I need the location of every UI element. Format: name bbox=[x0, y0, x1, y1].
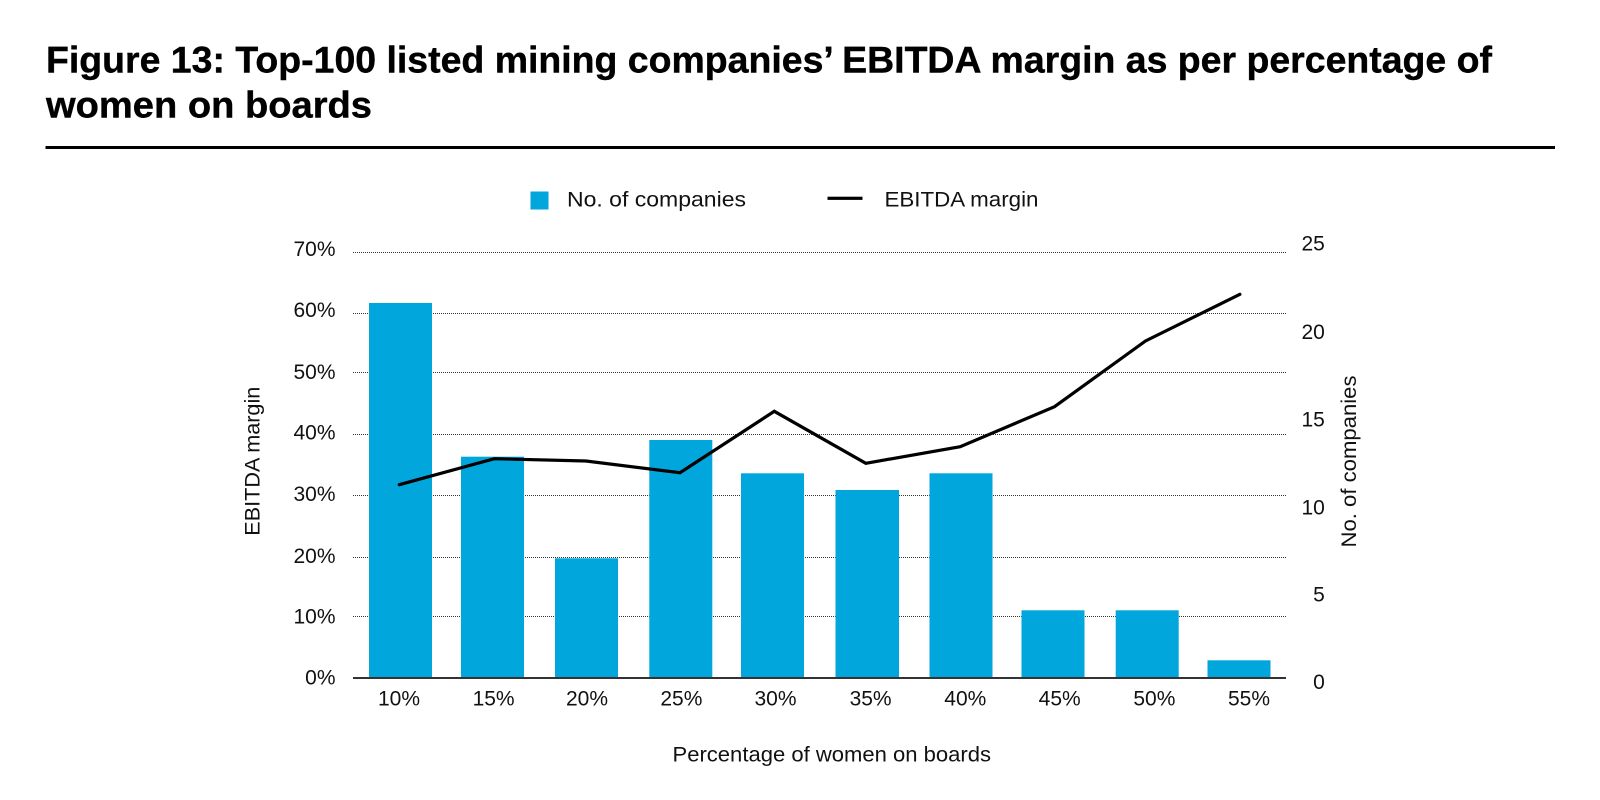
title bbox=[45, 40, 1493, 126]
left axis title: EBITDA margin bbox=[240, 387, 264, 536]
x axis labels: 10% bbox=[378, 688, 420, 711]
right axis labels: 25 bbox=[1301, 233, 1325, 256]
left axis labels: 10% bbox=[293, 606, 336, 629]
title: Figure 13: Top-100 listed mining companies’ EBITDA margin as per percentage of bbox=[46, 40, 1493, 81]
left axis labels: 0% bbox=[305, 666, 336, 689]
right axis labels: 5 bbox=[1313, 584, 1325, 607]
x axis labels: 30% bbox=[754, 688, 797, 711]
x axis labels: 40% bbox=[944, 688, 986, 711]
left axis labels bbox=[293, 238, 336, 689]
x axis title: Percentage of women on boards bbox=[672, 743, 991, 767]
left axis labels: 40% bbox=[293, 421, 336, 444]
x axis labels: 50% bbox=[1133, 688, 1175, 711]
right axis labels: 10 bbox=[1301, 497, 1325, 520]
x axis labels: 45% bbox=[1039, 688, 1081, 711]
x axis labels bbox=[378, 688, 1270, 711]
right axis labels: 0 bbox=[1313, 671, 1325, 694]
bar chart: no. of companies bbox=[369, 303, 1270, 677]
left axis labels: 60% bbox=[293, 299, 336, 322]
x axis labels: 55% bbox=[1228, 688, 1270, 711]
line chart: EBITDA margin bbox=[399, 294, 1240, 485]
x axis labels: 25% bbox=[660, 688, 702, 711]
left axis labels: 20% bbox=[293, 545, 336, 568]
right axis labels bbox=[1301, 233, 1325, 694]
left axis labels: 70% bbox=[293, 238, 336, 261]
title: women on boards bbox=[45, 85, 372, 126]
left axis labels: 50% bbox=[293, 361, 336, 384]
right axis labels: 20 bbox=[1301, 321, 1325, 344]
right axis title: No. of companies bbox=[1337, 376, 1361, 548]
legend: EBITDA margin bbox=[884, 188, 1038, 212]
legend bbox=[530, 188, 1038, 212]
legend: No. of companies bbox=[567, 188, 746, 212]
x axis labels: 15% bbox=[473, 688, 515, 711]
x axis labels: 20% bbox=[566, 688, 608, 711]
right axis labels: 15 bbox=[1301, 409, 1325, 432]
x axis labels: 35% bbox=[850, 688, 892, 711]
left axis labels: 30% bbox=[293, 483, 336, 506]
